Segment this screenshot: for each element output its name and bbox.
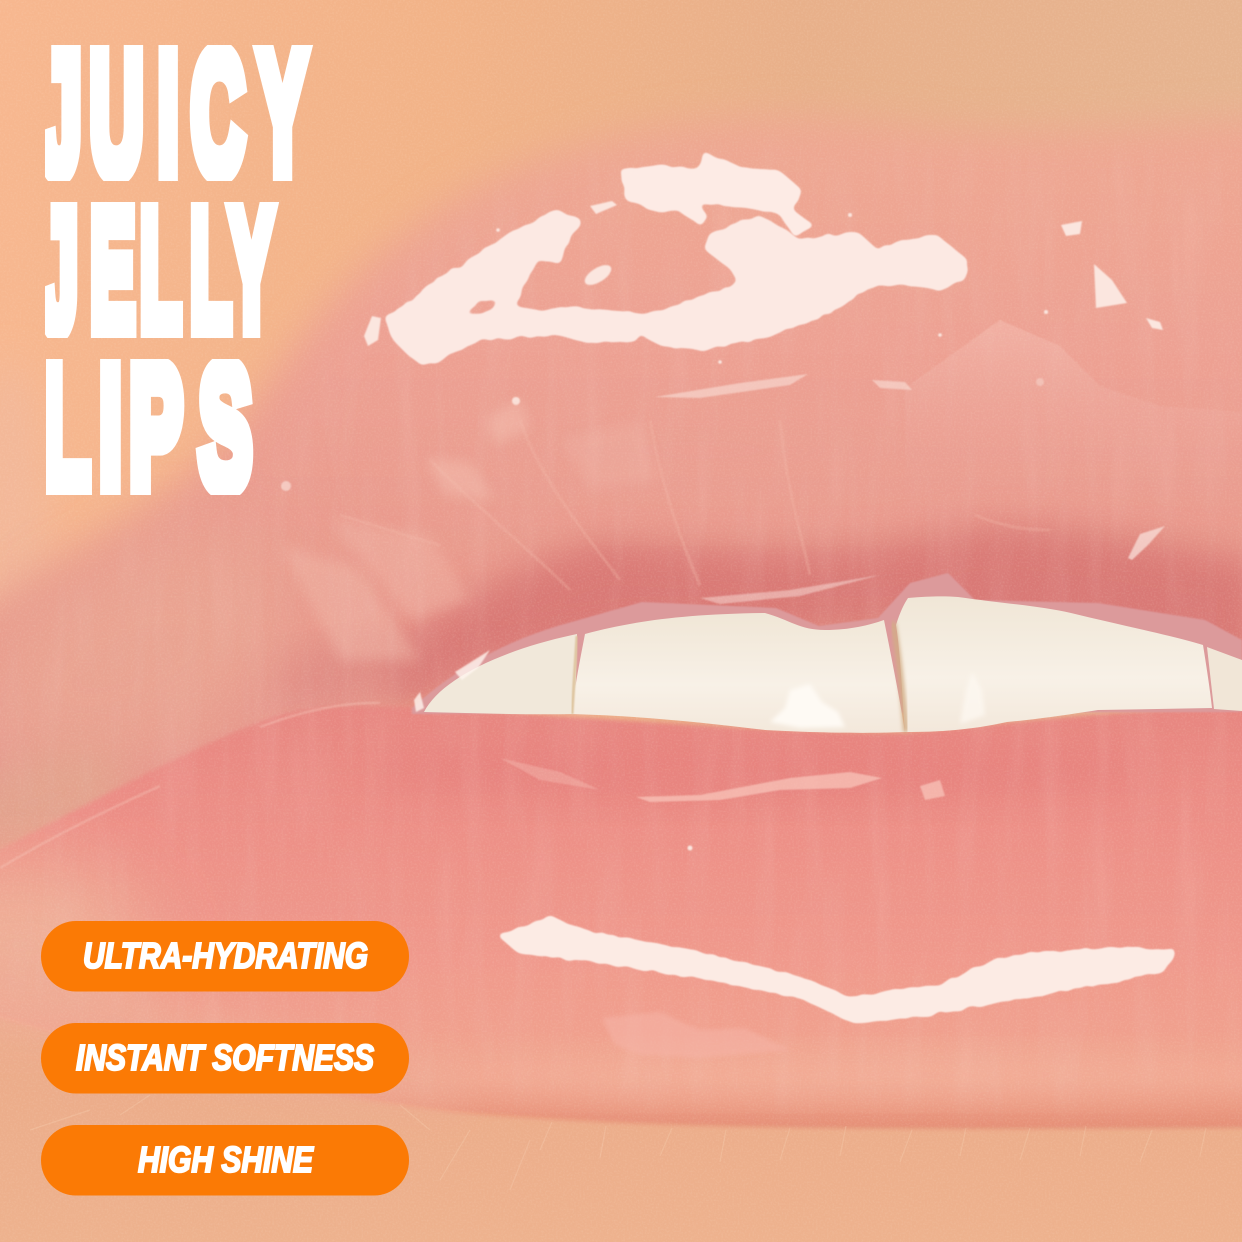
title line: lips: LIPS <box>41 328 252 525</box>
highlight: lower lip upper shine <box>500 758 945 802</box>
photo: gums inside mouth <box>412 573 1242 714</box>
highlight: upper lip mottled sheen <box>425 398 660 500</box>
badge: instant softness <box>41 1023 409 1094</box>
photo: upper lip creases <box>340 420 1050 590</box>
photo: gum edge shine <box>414 575 880 712</box>
badge: high shine <box>41 1125 409 1196</box>
photo: teeth <box>424 596 1242 733</box>
badge: ultra-hydrating <box>41 921 409 992</box>
photo: upper lip <box>0 115 1242 880</box>
highlight: lower lip soft reflection <box>602 1012 790 1058</box>
badges: product benefits <box>41 921 409 1196</box>
photo: lower lip <box>0 703 1242 1129</box>
badge: ultra-hydrating: ULTRA-HYDRATING <box>83 935 368 976</box>
lip crease shading <box>390 525 1242 720</box>
title <box>45 45 313 495</box>
lip crease highlight <box>0 703 380 868</box>
highlight: lower lip main gloss <box>497 917 1177 1024</box>
photo: skin below lower lip <box>0 1000 1242 1242</box>
title line: jelly: JELLY <box>41 172 274 369</box>
tooth: centre right <box>896 596 1212 732</box>
highlight: upper lip top gloss <box>620 152 814 238</box>
badge: instant softness: INSTANT SOFTNESS <box>76 1037 374 1078</box>
tooth: centre left <box>572 613 905 733</box>
highlight: small gloss spots <box>281 201 1165 850</box>
tooth: left small <box>424 634 577 714</box>
badge: high shine: HIGH SHINE <box>138 1139 314 1180</box>
photo: fine hairs along lower lip edge <box>30 1075 1206 1190</box>
tooth: right edge <box>1207 647 1242 711</box>
title line: juicy: JUICY <box>40 15 307 212</box>
highlight: upper lip main gloss <box>384 209 968 366</box>
tooth highlight <box>770 684 845 728</box>
